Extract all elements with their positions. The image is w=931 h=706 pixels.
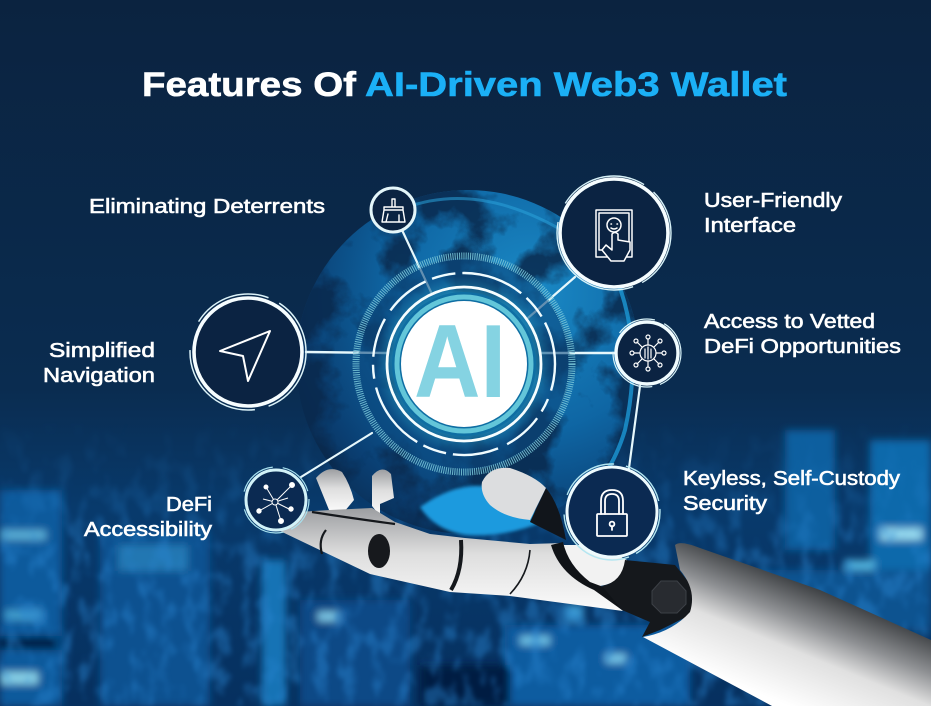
- node: user-friendly interface: [557, 176, 671, 290]
- AI core with rings: [356, 256, 572, 472]
- inner white ring: [387, 287, 541, 441]
- halo: [376, 276, 552, 452]
- city window texture: [0, 452, 931, 706]
- label: access to vetted defi opportunities: DeFi Opportunities: [704, 336, 901, 358]
- label: eliminating deterrents: Eliminating Deterrents: [89, 196, 325, 218]
- octagon detail: [652, 581, 686, 613]
- striped ring: [356, 256, 572, 472]
- bright lower sea: [420, 486, 548, 535]
- icon: padlock: [597, 490, 627, 536]
- label: keyless self-custody security: Keyless, Self-Custody: [683, 468, 900, 490]
- icon: broom: [382, 199, 405, 222]
- globe: [296, 190, 640, 535]
- label: defi accessibility: [84, 494, 212, 541]
- node: access to vetted defi opportunities: [613, 319, 681, 387]
- forearm: [643, 543, 931, 706]
- node: keyless security: [564, 464, 660, 560]
- title: Features Of: [142, 66, 357, 104]
- bright top rim: [405, 199, 570, 235]
- thumb base: [556, 545, 627, 586]
- label: keyless self-custody security: Security: [683, 493, 767, 515]
- label: user-friendly interface: [704, 190, 842, 237]
- icon: network bulb: [630, 335, 666, 371]
- icon: navigation arrow: [220, 331, 270, 381]
- label: defi accessibility: DeFi: [166, 494, 212, 516]
- finger one: [316, 469, 354, 512]
- continents: [296, 190, 640, 534]
- robot hand: [278, 468, 931, 706]
- wrist joint: [602, 560, 695, 637]
- node: eliminating deterrents: [371, 188, 415, 232]
- label: access to vetted defi opportunities: Access to Vetted: [704, 311, 875, 333]
- connector lines: [301, 230, 640, 477]
- dashed ring: [359, 259, 569, 469]
- thumb: [482, 468, 546, 520]
- finger two: [372, 469, 394, 516]
- palm: [278, 508, 623, 611]
- title: AI-Driven Web3 Wallet: [365, 66, 787, 104]
- icon: hub network: [257, 482, 294, 524]
- AI letters: AI: [414, 304, 506, 420]
- blurred city skyline: [0, 420, 931, 706]
- icon: touch screen: [596, 210, 632, 261]
- label: simplified navigation: [43, 340, 155, 387]
- label: access to vetted defi opportunities: [704, 311, 901, 358]
- node: simplified navigation: [190, 294, 306, 410]
- bright right rim: [575, 268, 633, 505]
- label: user-friendly interface: Interface: [704, 215, 796, 237]
- label: user-friendly interface: User-Friendly: [704, 190, 842, 212]
- label: defi accessibility: Accessibility: [84, 519, 212, 541]
- title: [142, 66, 787, 104]
- label: keyless self-custody security: [683, 468, 900, 515]
- label: simplified navigation: Simplified: [49, 340, 155, 362]
- dark seams: [312, 512, 530, 594]
- node: defi accessibility: [243, 467, 309, 533]
- thumb joint: [530, 488, 566, 540]
- label: simplified navigation: Navigation: [43, 365, 155, 387]
- knuckle joint: [368, 534, 390, 568]
